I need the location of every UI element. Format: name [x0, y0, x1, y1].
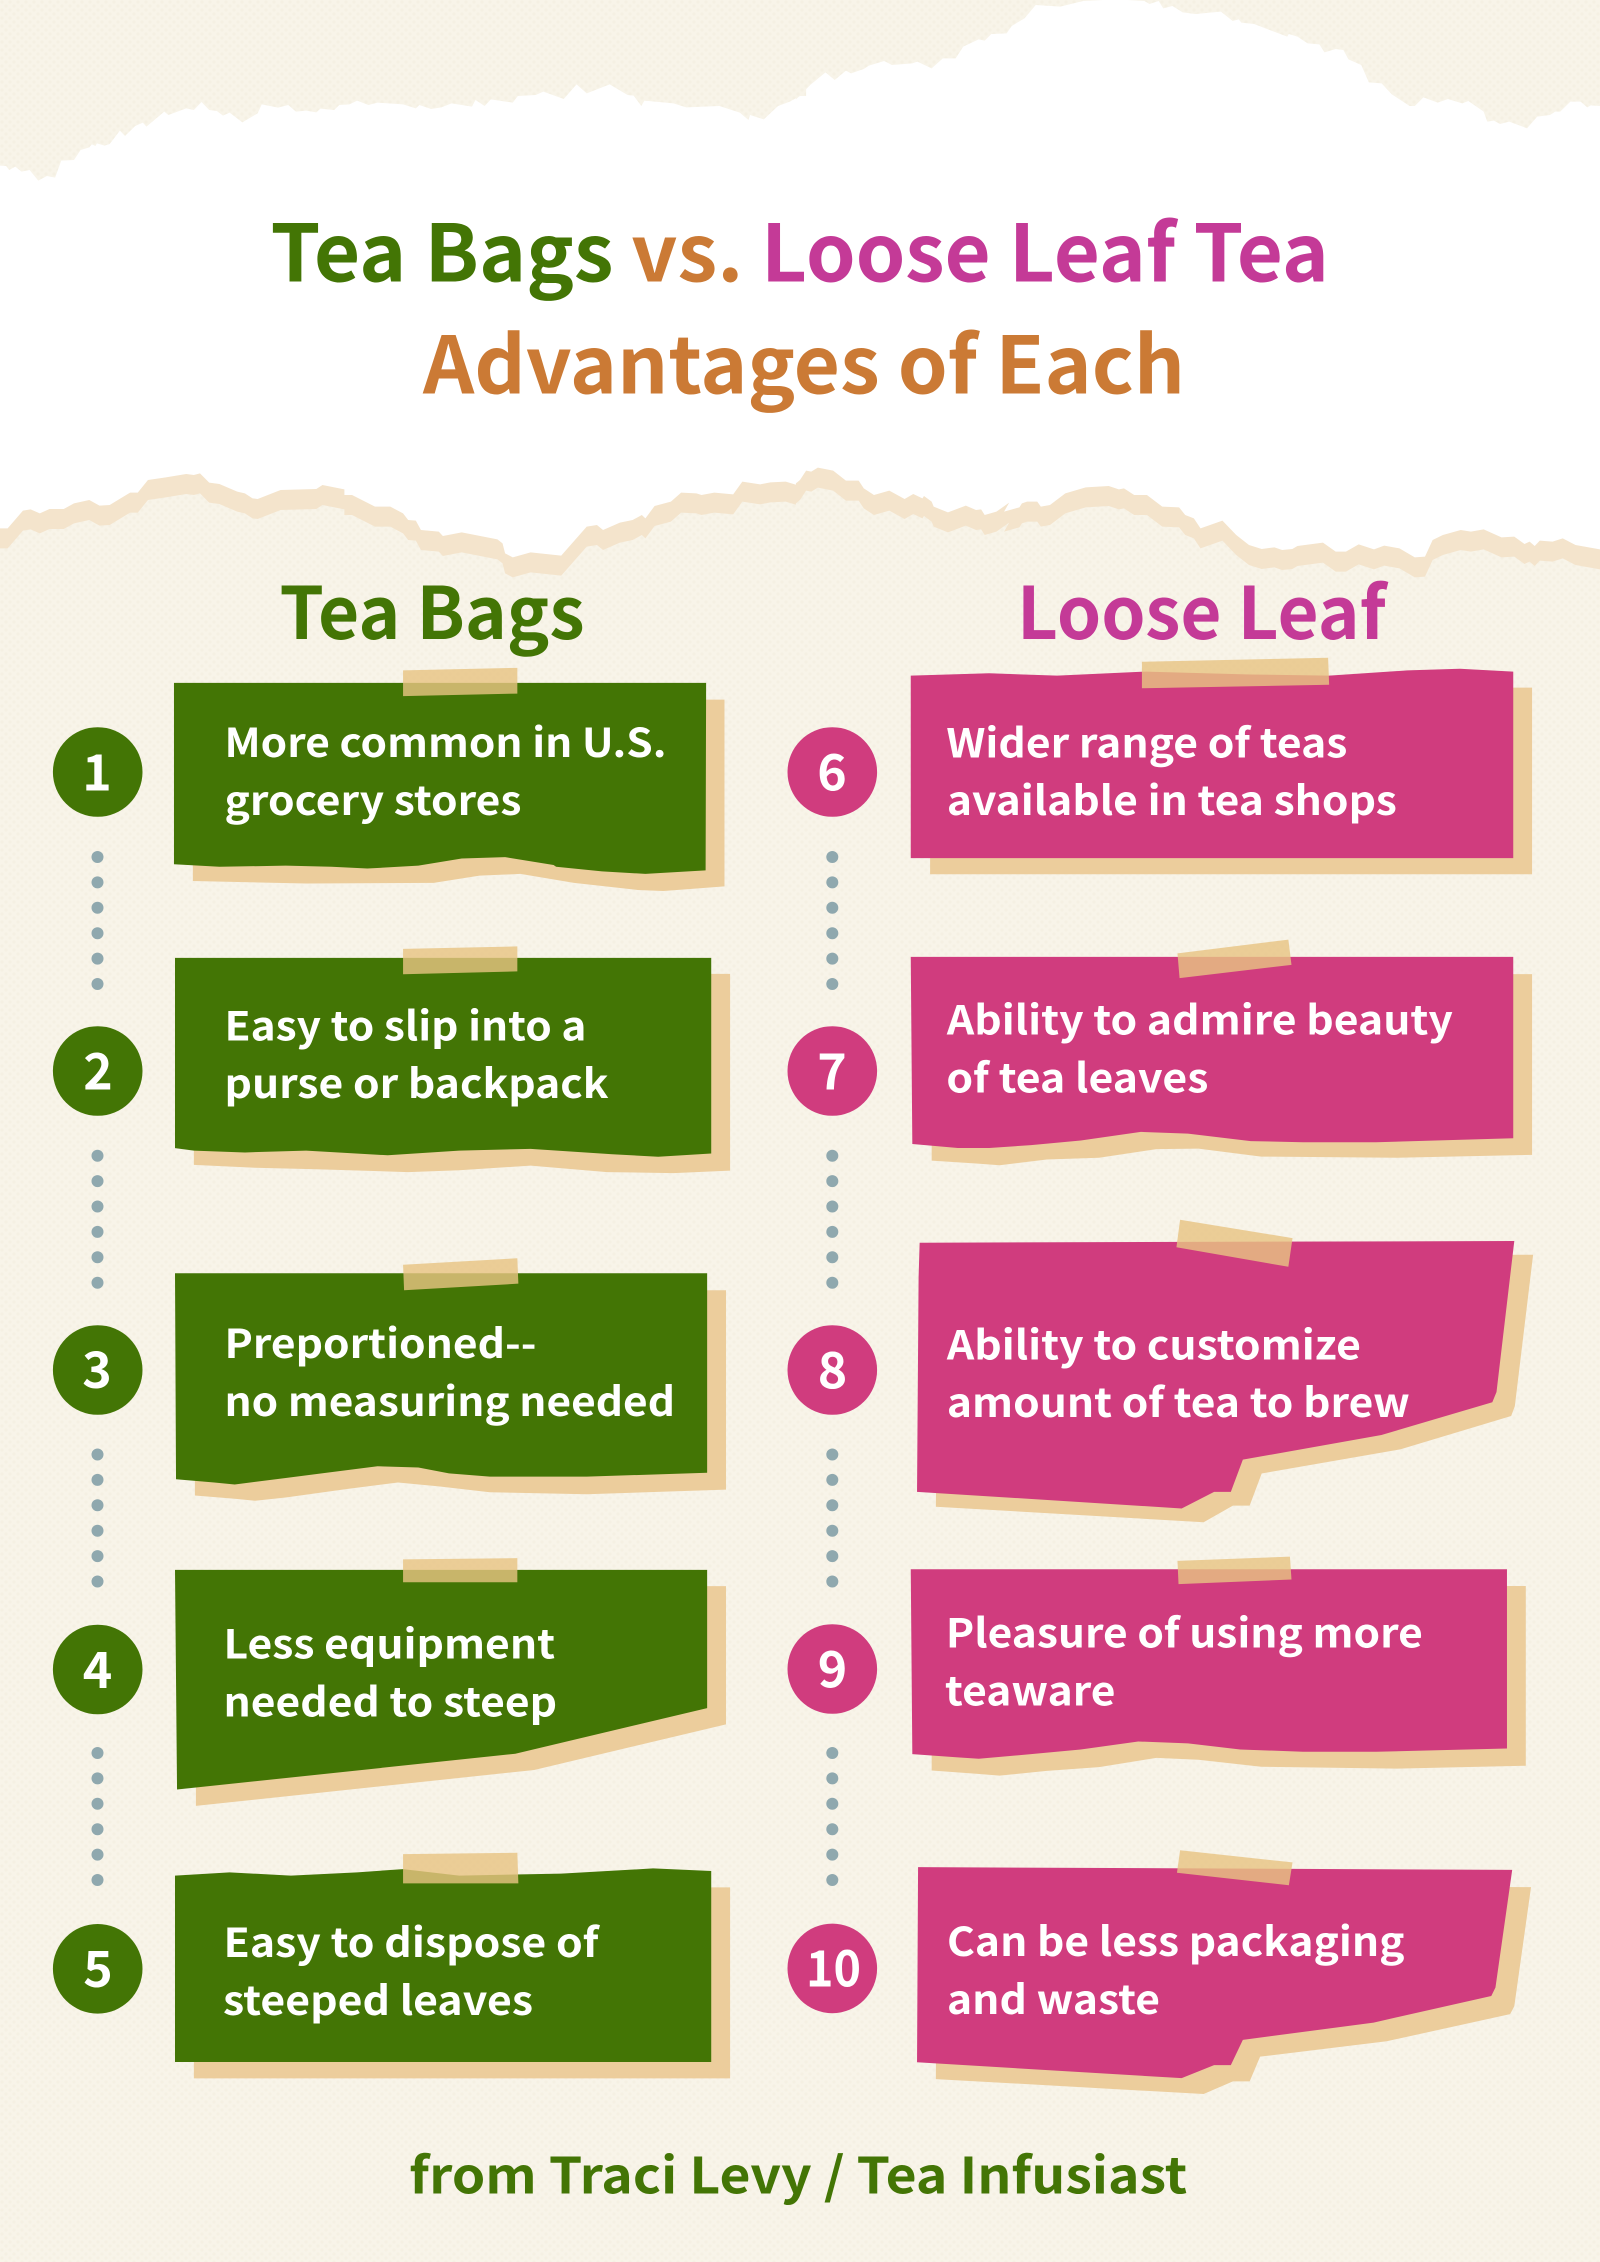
card 10 text [947, 1910, 1405, 2026]
card 7 paper [911, 940, 1532, 1165]
panel: card 2 [175, 946, 730, 1173]
badge 10: 10 [806, 1930, 861, 2002]
card 6 text [946, 711, 1397, 827]
panel: card 4 [175, 1558, 726, 1806]
card 7 text: Ability to admire beauty [946, 988, 1453, 1046]
title: loose leaf tea: Loose Leaf Tea [761, 190, 1329, 304]
card 9 text: Pleasure of using more [946, 1602, 1423, 1660]
card 6 text: available in tea shops [947, 769, 1397, 827]
card 1 paper [174, 668, 724, 891]
card 4 paper [175, 1558, 726, 1806]
card 3 paper [175, 1258, 726, 1501]
connector dots 4-5 [92, 1747, 104, 1886]
card 5 text: Easy to dispose of [224, 1911, 601, 1969]
card 4 text [224, 1612, 557, 1728]
card 6 text: Wider range of teas [946, 711, 1347, 769]
badge 7 [788, 1026, 877, 1116]
panel: card 1 [174, 668, 724, 891]
card 9 paper [911, 1557, 1526, 1776]
badge 6: 6 [817, 734, 847, 806]
panel: card 7 [911, 940, 1532, 1165]
badge 6 [788, 727, 877, 817]
connector dots 8-9 [826, 1448, 838, 1588]
card 1 text: More common in U.S. [224, 711, 666, 769]
card 8 text: Ability to customize [946, 1313, 1361, 1371]
card 10 text: Can be less packaging [947, 1910, 1405, 1968]
card 2 text [224, 995, 608, 1110]
card 5 paper [175, 1853, 730, 2078]
heading: tea bags: Tea Bags [280, 555, 584, 660]
badge 1 [53, 727, 143, 817]
badge 3: 3 [82, 1331, 112, 1403]
panel: card 5 [175, 1853, 730, 2078]
title: vs: vs. [631, 190, 743, 304]
card 2 text: purse or backpack [224, 1052, 608, 1110]
badge 10 [788, 1924, 877, 2013]
badge 5: 5 [83, 1930, 113, 2002]
footer credit: from Traci Levy / Tea Infusiast [409, 2136, 1187, 2208]
card 10 paper [917, 1850, 1531, 2094]
badge 9 [788, 1624, 877, 1714]
badge 1: 1 [82, 734, 112, 806]
card 1 text [224, 711, 666, 827]
connector dots 2-3 [92, 1150, 104, 1289]
torn paper header [0, 0, 1600, 607]
connector dots 9-10 [826, 1747, 838, 1886]
card 4 text: Less equipment [224, 1612, 555, 1670]
card 2 text: Easy to slip into a [224, 995, 586, 1053]
card 4 text: needed to steep [224, 1670, 557, 1728]
heading: loose leaf: Loose Leaf [1017, 555, 1389, 660]
connector dots 3-4 [92, 1448, 104, 1588]
panel: card 10 [917, 1850, 1531, 2094]
badge 8 [788, 1325, 877, 1415]
badge 2: 2 [83, 1032, 113, 1104]
connector dots 1-2 [92, 851, 104, 990]
card 6 paper [911, 658, 1532, 874]
card 8 text [946, 1313, 1410, 1429]
card 8 text: amount of tea to brew [947, 1371, 1410, 1429]
panel: card 9 [911, 1557, 1526, 1776]
card 7 text [946, 988, 1453, 1104]
card 3 text: Preportioned-- [224, 1312, 536, 1370]
connector dots 6-7 [826, 851, 838, 990]
badge 3 [53, 1325, 143, 1415]
title: tea bags: Tea Bags [270, 190, 614, 304]
title [270, 190, 1329, 416]
card 9 text [945, 1602, 1423, 1718]
card 10 text: and waste [947, 1968, 1160, 2026]
badge 8: 8 [818, 1332, 847, 1404]
card 7 text: of tea leaves [946, 1046, 1208, 1104]
badge 9: 9 [818, 1630, 847, 1702]
card 3 text [224, 1312, 675, 1428]
badge 4 [53, 1625, 143, 1714]
badge 4: 4 [83, 1631, 112, 1703]
card 5 text: steeped leaves [223, 1969, 533, 2027]
card 8 paper [917, 1220, 1533, 1522]
badge 5 [53, 1924, 143, 2014]
badge 7: 7 [817, 1032, 847, 1104]
card 3 text: no measuring needed [224, 1370, 675, 1428]
subtitle: Advantages of Each [422, 301, 1185, 416]
card 1 text: grocery stores [224, 769, 522, 827]
panel: card 6 [911, 658, 1532, 874]
card 2 paper [175, 946, 730, 1173]
panel: card 8 [917, 1220, 1533, 1522]
badge 2 [53, 1026, 143, 1116]
panel: card 3 [175, 1258, 726, 1501]
card 5 text [223, 1911, 601, 2027]
connector dots 7-8 [826, 1150, 838, 1289]
card 9 text: teaware [945, 1660, 1116, 1718]
